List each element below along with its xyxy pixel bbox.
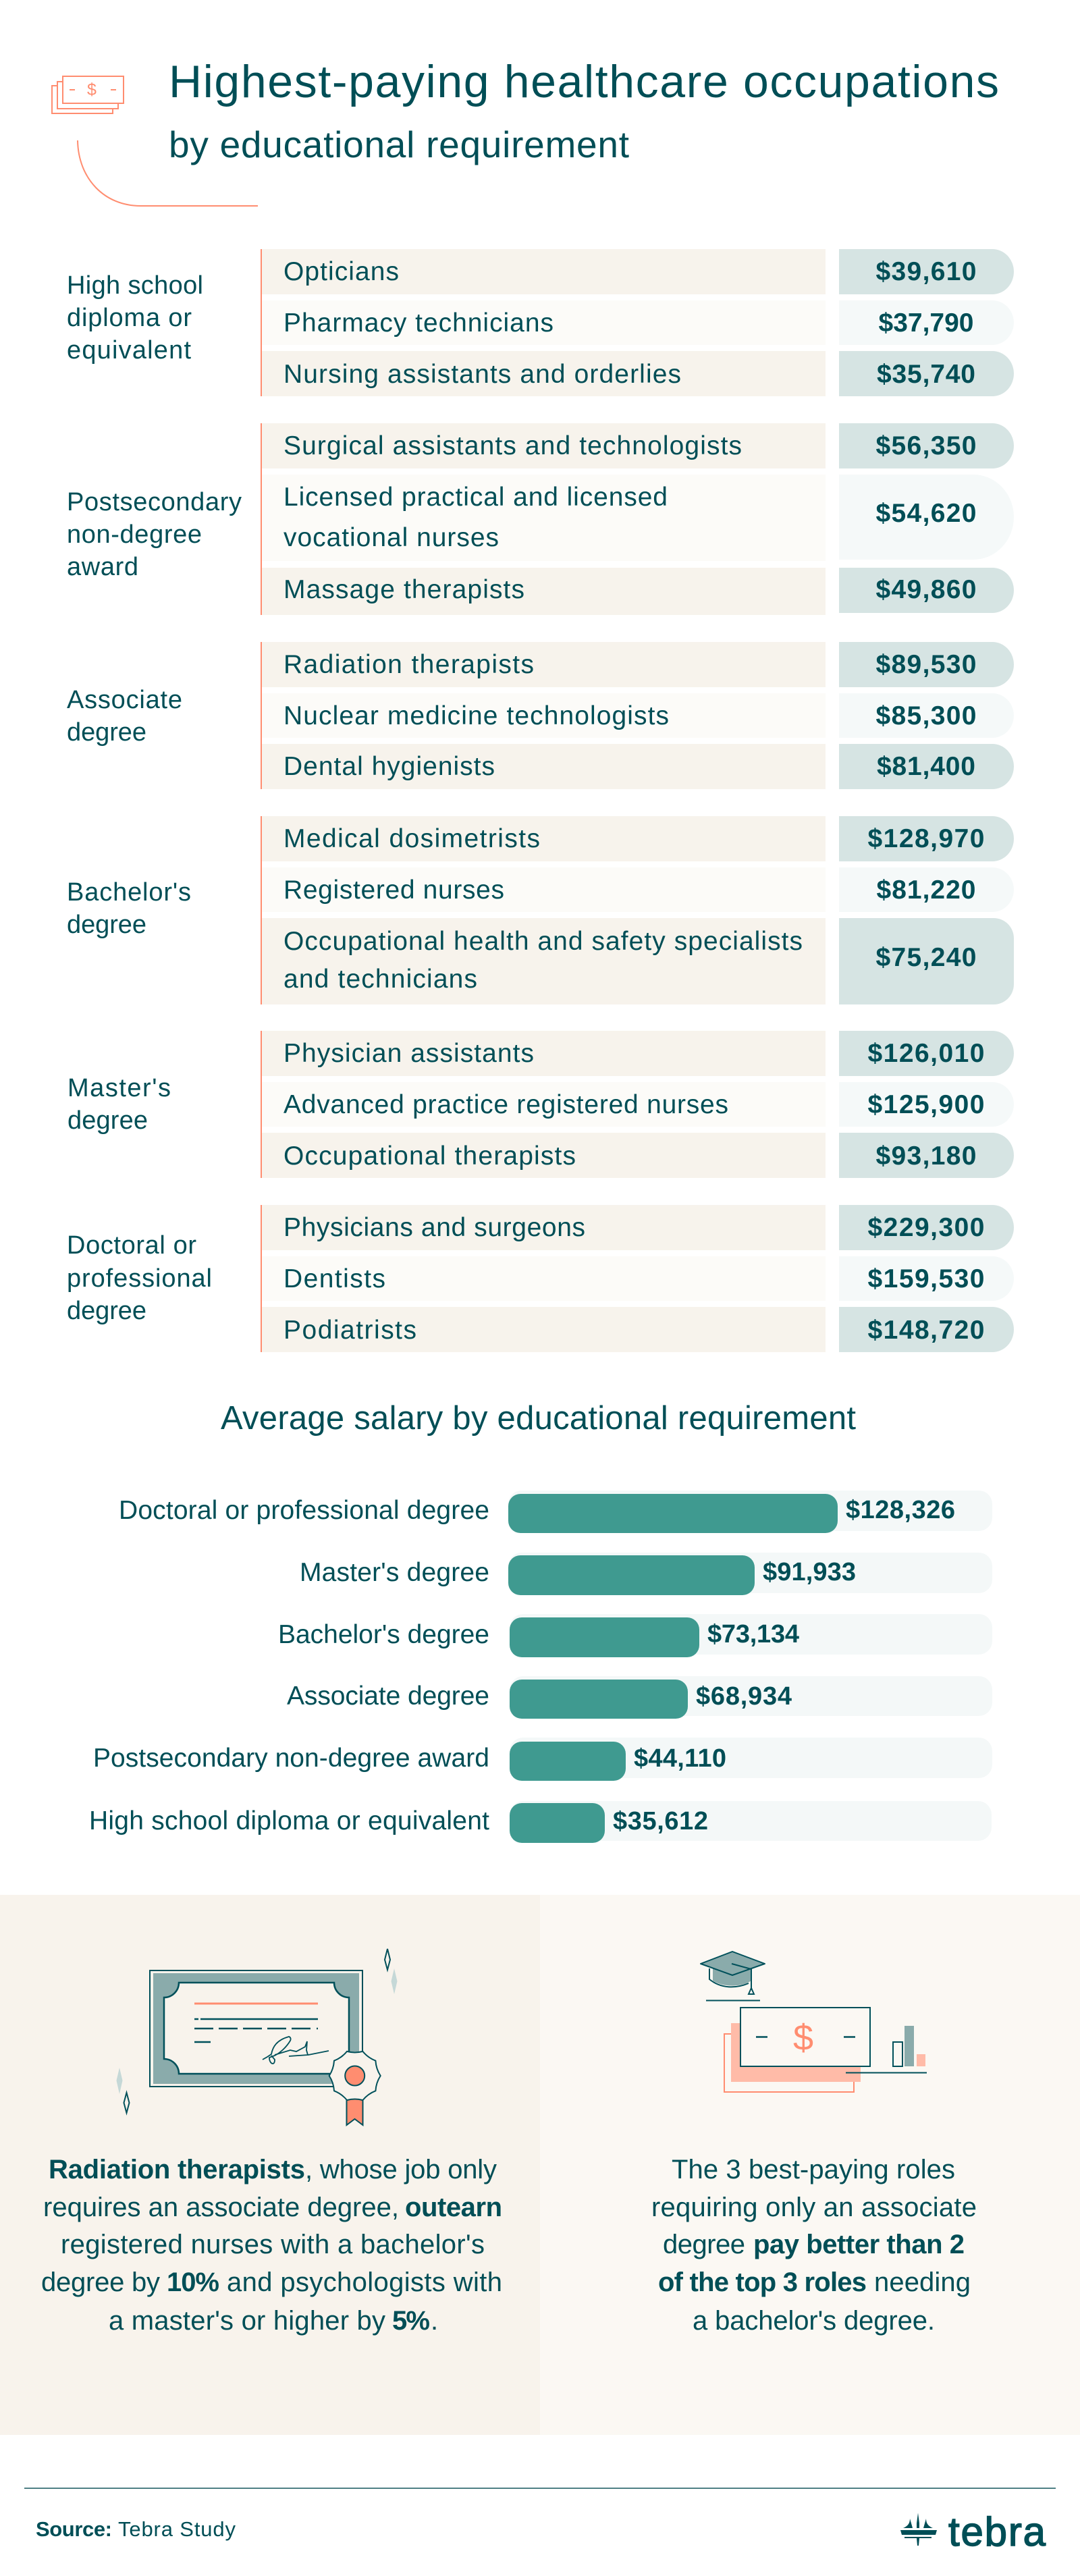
row: Nuclear medicine technologists — [262, 693, 1014, 738]
bar: high school diploma or equivalent — [89, 1801, 992, 1843]
group label: High school — [67, 271, 203, 300]
row: Occupational health and safety specialists and technicians: $75,240 — [876, 943, 976, 972]
group label: non-degree — [67, 520, 202, 549]
callout text: outearn — [405, 2193, 502, 2222]
callout text: Radiation therapists — [49, 2155, 305, 2184]
bar: associate degree: Associate degree — [287, 1682, 489, 1711]
row: Surgical assistants and technologists — [262, 423, 1014, 468]
bar: bachelor's degree: $73,134 — [707, 1620, 799, 1648]
table group: associate degree — [67, 642, 1014, 789]
icon: stacked dollar bills — [52, 76, 124, 113]
row: Registered nurses: Registered nurses — [284, 876, 504, 905]
row: Dentists: $159,530 — [868, 1264, 984, 1293]
group rule — [261, 1205, 262, 1352]
icon: stacked dollar bills: $ — [87, 80, 97, 99]
group label: degree — [67, 1297, 146, 1325]
row: Massage therapists: $49,860 — [876, 575, 976, 604]
row: Advanced practice registered nurses: Advanced practice registered nurses — [284, 1090, 728, 1119]
callout text — [651, 2155, 977, 2336]
row: Nuclear medicine technologists: $85,300 — [876, 701, 976, 730]
group rule — [261, 249, 262, 396]
row: Registered nurses — [262, 867, 1014, 912]
panel: radiation therapists callout — [0, 1895, 540, 2435]
group label: Doctoral or — [67, 1231, 196, 1260]
callout text: degree — [663, 2230, 745, 2259]
callout text: 10% — [167, 2268, 219, 2297]
title: Highest-paying healthcare occupations — [169, 56, 999, 107]
row: Licensed practical and licensed vocational nurses: $54,620 — [876, 499, 976, 528]
row: Dental hygienists: Dental hygienists — [284, 752, 495, 781]
row: Medical dosimetrists: Medical dosimetrists — [284, 824, 540, 853]
row: Podiatrists: Podiatrists — [284, 1316, 416, 1345]
group label — [67, 878, 191, 939]
bar: doctoral or professional degree — [119, 1491, 992, 1533]
callout text: a bachelor's degree. — [693, 2306, 935, 2336]
group label — [67, 488, 242, 581]
row: Occupational health and safety specialists and technicians: Occupational health and safety specialists — [284, 927, 803, 956]
callout text — [41, 2155, 502, 2336]
group rule — [261, 1031, 262, 1178]
row: Radiation therapists: Radiation therapists — [284, 650, 534, 679]
group label — [67, 686, 182, 747]
row: Surgical assistants and technologists: $56,350 — [876, 431, 976, 460]
group label — [67, 271, 203, 365]
bar: postsecondary non-degree award: Postsecondary non-degree award — [93, 1744, 489, 1773]
callout text: requiring only an associate — [651, 2193, 977, 2222]
row: Dental hygienists — [262, 744, 1014, 789]
group label: equivalent — [67, 336, 191, 365]
group label: award — [67, 553, 138, 581]
callout text: . — [431, 2306, 438, 2336]
footer — [24, 2488, 1056, 2554]
bar: bachelor's degree — [278, 1614, 992, 1657]
row: Opticians: $39,610 — [876, 257, 976, 286]
group label: Master's — [68, 1074, 171, 1102]
group rule — [261, 642, 262, 789]
row: Physicians and surgeons: $229,300 — [868, 1213, 984, 1242]
callout text: pay better than 2 — [753, 2230, 965, 2259]
callout text: and psychologists with — [227, 2268, 502, 2297]
row: Opticians: Opticians — [284, 257, 399, 286]
group label: Bachelor's — [67, 878, 191, 907]
icon: graduation cap, dollar bill and mini bar chart: $ — [793, 2018, 813, 2058]
bar: associate degree — [287, 1676, 992, 1719]
table group: postsecondary non-degree award — [67, 423, 1014, 615]
decorative curve connector — [78, 140, 258, 206]
callout text: a master's or higher by — [109, 2306, 385, 2336]
row: Radiation therapists — [262, 642, 1014, 687]
row: Radiation therapists: $89,530 — [876, 650, 976, 679]
bar: postsecondary non-degree award — [93, 1738, 992, 1781]
bar: master's degree — [300, 1553, 992, 1595]
icon: graduation cap, dollar bill and mini bar chart — [701, 1952, 927, 2092]
chart heading: Average salary by educational requirement — [221, 1400, 856, 1437]
table group: high school diploma or equivalent — [67, 249, 1014, 396]
row: Registered nurses: $81,220 — [876, 876, 976, 905]
bar: doctoral or professional degree: Doctoral or professional degree — [119, 1496, 489, 1525]
group label: professional — [67, 1264, 212, 1293]
logo: tebra: tebra — [948, 2509, 1046, 2554]
row: Podiatrists: $148,720 — [868, 1316, 984, 1345]
bar: bachelor's degree: Bachelor's degree — [278, 1620, 489, 1649]
row: Occupational health and safety specialists and technicians: and technicians — [284, 965, 477, 994]
row: Medical dosimetrists: $128,970 — [868, 824, 984, 853]
row: Physician assistants: $126,010 — [868, 1039, 984, 1068]
group rule — [261, 423, 262, 615]
panel: best-paying associate roles callout — [540, 1895, 1080, 2435]
row: Occupational therapists: Occupational therapists — [284, 1142, 576, 1171]
row: Pharmacy technicians: Pharmacy technicians — [284, 308, 554, 338]
group label: Postsecondary — [67, 488, 242, 516]
row: Nursing assistants and orderlies: $35,740 — [877, 360, 975, 389]
row: Pharmacy technicians: $37,790 — [879, 308, 973, 338]
row: Physicians and surgeons — [262, 1205, 1014, 1250]
source credit — [36, 2517, 236, 2541]
bar: high school diploma or equivalent: High school diploma or equivalent — [89, 1806, 489, 1835]
header — [52, 56, 999, 206]
row: Licensed practical and licensed vocational nurses — [262, 475, 1014, 561]
row: Dentists: Dentists — [284, 1264, 385, 1293]
bar: doctoral or professional degree: $128,326 — [846, 1496, 955, 1524]
group label: degree — [67, 911, 146, 939]
row: Advanced practice registered nurses: $125,900 — [868, 1090, 984, 1119]
callout text: degree by — [41, 2268, 160, 2297]
row: Licensed practical and licensed vocational nurses: Licensed practical and licensed — [284, 483, 668, 512]
table group: bachelor's degree — [67, 816, 1014, 1004]
callout text: , whose job only — [305, 2155, 497, 2184]
group label: diploma or — [67, 304, 192, 332]
row: Massage therapists — [262, 568, 1014, 615]
row: Nursing assistants and orderlies — [262, 351, 1014, 396]
row: Dental hygienists: $81,400 — [877, 752, 975, 781]
group label: degree — [67, 718, 146, 747]
table group: master's degree — [68, 1031, 1014, 1178]
row: Nursing assistants and orderlies: Nursing assistants and orderlies — [284, 360, 681, 389]
row: Medical dosimetrists — [262, 816, 1014, 861]
callout text: registered nurses with a bachelor's — [61, 2230, 485, 2259]
group label: Associate — [67, 686, 182, 714]
group label — [67, 1231, 212, 1325]
icon: certificate with seal — [116, 1949, 397, 2125]
subtitle: by educational requirement — [169, 124, 629, 165]
group label — [68, 1074, 171, 1135]
row: Opticians — [262, 249, 1014, 294]
row: Podiatrists — [262, 1307, 1014, 1352]
bar chart: average salary by educational requirement — [89, 1400, 992, 1843]
source credit: Tebra Study — [118, 2517, 236, 2541]
logo: tebra — [900, 2509, 1046, 2554]
row: Physician assistants: Physician assistants — [284, 1039, 534, 1068]
callout text: of the top 3 roles — [658, 2268, 867, 2297]
bar: postsecondary non-degree award: $44,110 — [634, 1744, 726, 1773]
callout text: The 3 best-paying roles — [672, 2155, 955, 2184]
group label: degree — [68, 1106, 148, 1135]
row: Nuclear medicine technologists: Nuclear medicine technologists — [284, 701, 669, 730]
row: Pharmacy technicians — [262, 300, 1014, 345]
row: Physician assistants — [262, 1031, 1014, 1076]
row: Dentists — [262, 1256, 1014, 1301]
callout text: requires an associate degree, — [43, 2193, 399, 2222]
row: Massage therapists: Massage therapists — [284, 575, 524, 604]
row: Occupational therapists: $93,180 — [876, 1142, 976, 1171]
row: Occupational health and safety specialists and technicians — [262, 918, 1014, 1004]
bar: associate degree: $68,934 — [696, 1682, 792, 1711]
group rule — [261, 816, 262, 1004]
row: Physicians and surgeons: Physicians and surgeons — [284, 1213, 585, 1242]
source credit: Source: — [36, 2517, 112, 2541]
row: Licensed practical and licensed vocational nurses: vocational nurses — [284, 523, 499, 552]
row: Occupational therapists — [262, 1133, 1014, 1178]
callout text: needing — [874, 2268, 971, 2297]
callout text: 5% — [392, 2306, 430, 2336]
bar: high school diploma or equivalent: $35,612 — [613, 1807, 708, 1835]
bar: master's degree: $91,933 — [763, 1558, 856, 1586]
row: Advanced practice registered nurses — [262, 1082, 1014, 1127]
table group: doctoral or professional degree — [67, 1205, 1014, 1352]
row: Surgical assistants and technologists: Surgical assistants and technologists — [284, 431, 742, 460]
bar: master's degree: Master's degree — [300, 1558, 489, 1587]
